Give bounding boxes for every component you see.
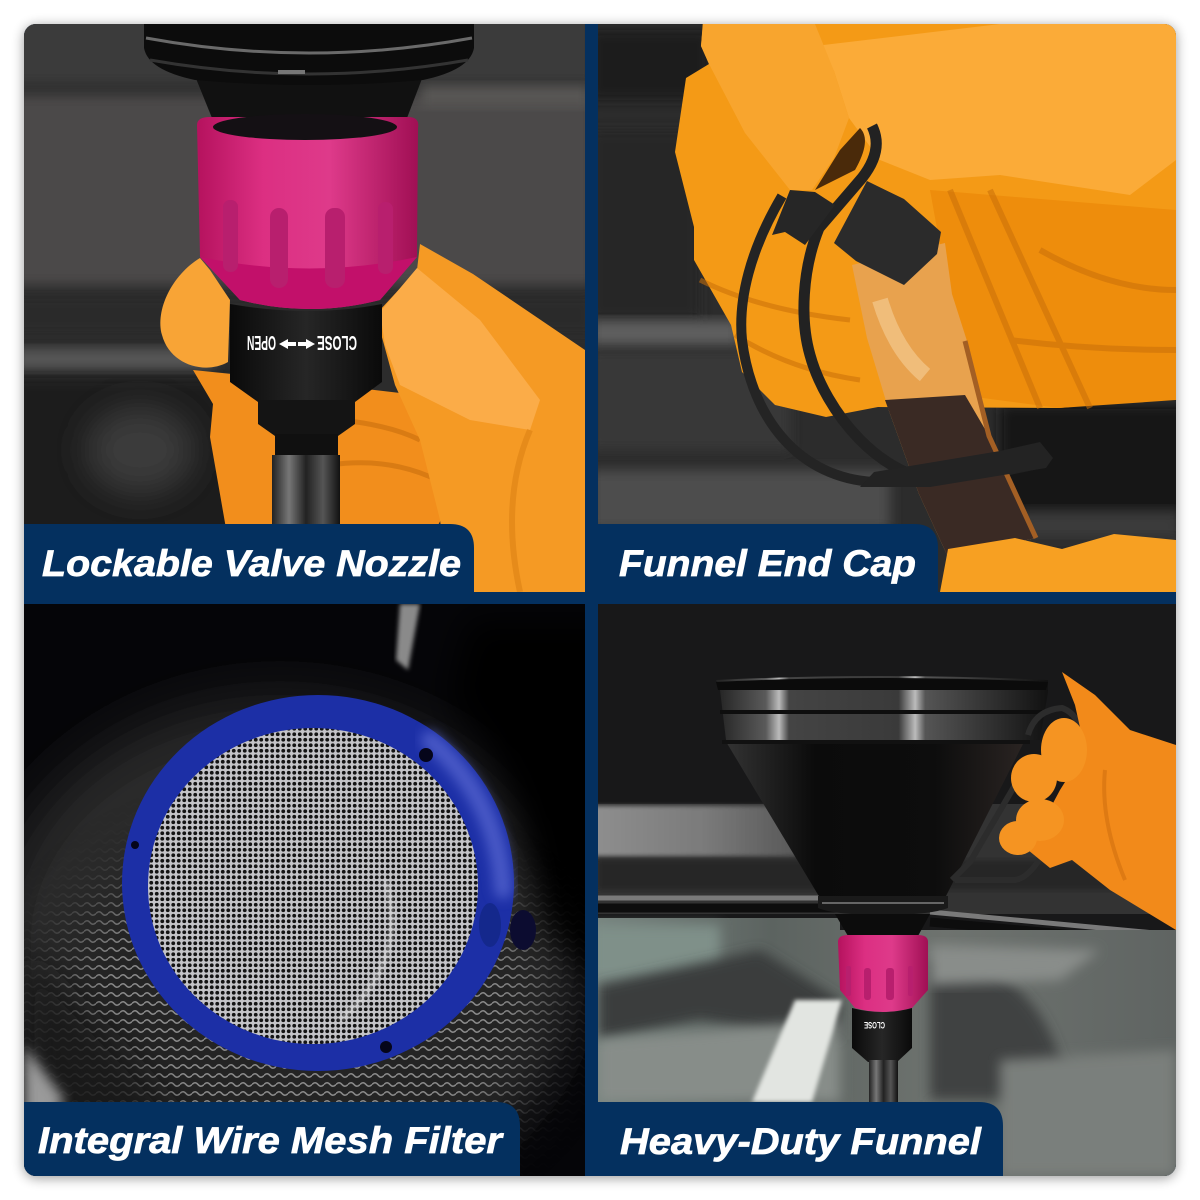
- ring tabs: [131, 748, 536, 1053]
- glove main hand: [675, 20, 1180, 417]
- panel: heavy-duty funnel: [590, 604, 1176, 1176]
- inner strap loop: [804, 126, 1045, 482]
- stem: [869, 1060, 898, 1110]
- panel: integral wire mesh filter: [24, 604, 585, 1176]
- end cap tab: [860, 442, 1053, 487]
- ring highlight: [430, 740, 503, 890]
- blue filter ring: [122, 695, 514, 1071]
- glove back fingers: [193, 370, 440, 524]
- strap joint: [772, 190, 835, 245]
- label: funnel end cap: Funnel End Cap: [619, 543, 916, 584]
- clear tube: [852, 243, 1036, 557]
- glove: [1028, 672, 1176, 930]
- pink collar: [197, 117, 418, 309]
- funnel rim: [144, 24, 474, 85]
- collar lower band: [200, 257, 417, 309]
- glove upper knuckles: [815, 24, 1176, 195]
- valve open close text: [248, 336, 357, 350]
- valve stem: [258, 400, 355, 530]
- funnel collar: [818, 896, 948, 936]
- end cap plug: [834, 181, 941, 285]
- glove palm and thumb: [380, 244, 585, 592]
- label: integral wire mesh filter: Integral Wire Mesh Filter: [38, 1120, 505, 1161]
- valve close text: CLOSE: [864, 1020, 885, 1030]
- valve body: [852, 1008, 912, 1062]
- label: integral wire mesh filter: [24, 1102, 520, 1176]
- panel: lockable valve nozzle: [14, 14, 594, 592]
- label: lockable valve nozzle: [24, 524, 474, 604]
- label: heavy-duty funnel: Heavy-Duty Funnel: [620, 1121, 982, 1162]
- glove shaded folds: [700, 190, 1176, 408]
- funnel handle: [952, 708, 1085, 880]
- collar ridges: [846, 966, 913, 1000]
- glove lower fingers: [940, 534, 1176, 592]
- glove left finger: [160, 258, 230, 368]
- glove fingers over handle: [999, 718, 1087, 855]
- horizontal divider: [24, 592, 1176, 604]
- label: lockable valve nozzle: Lockable Valve Nozzle: [42, 543, 461, 584]
- photo background: [24, 24, 585, 524]
- photo background: [590, 24, 1190, 592]
- valve open close text: CLOSE: [317, 331, 357, 353]
- funnel cone: [725, 740, 1025, 898]
- photo background: [24, 604, 585, 1176]
- valve open close text: OPEN: [247, 331, 276, 353]
- collar ridges: [223, 200, 393, 288]
- glove fingertip: [701, 24, 849, 190]
- label: funnel end cap: [598, 524, 938, 592]
- pink collar: [838, 935, 928, 1012]
- label: heavy-duty funnel: [598, 1102, 1003, 1176]
- wire mesh: [148, 728, 478, 1044]
- mesh crease: [340, 880, 392, 1020]
- photo background: [590, 604, 1176, 1176]
- collar inner opening: [213, 117, 397, 140]
- funnel rim: [716, 676, 1048, 742]
- vertical divider: [585, 24, 598, 1176]
- ring hole: [815, 128, 865, 190]
- outer strap loop: [741, 196, 874, 482]
- valve lower body: [230, 304, 382, 402]
- panel: funnel end cap: [590, 20, 1190, 592]
- funnel neck: [196, 80, 422, 117]
